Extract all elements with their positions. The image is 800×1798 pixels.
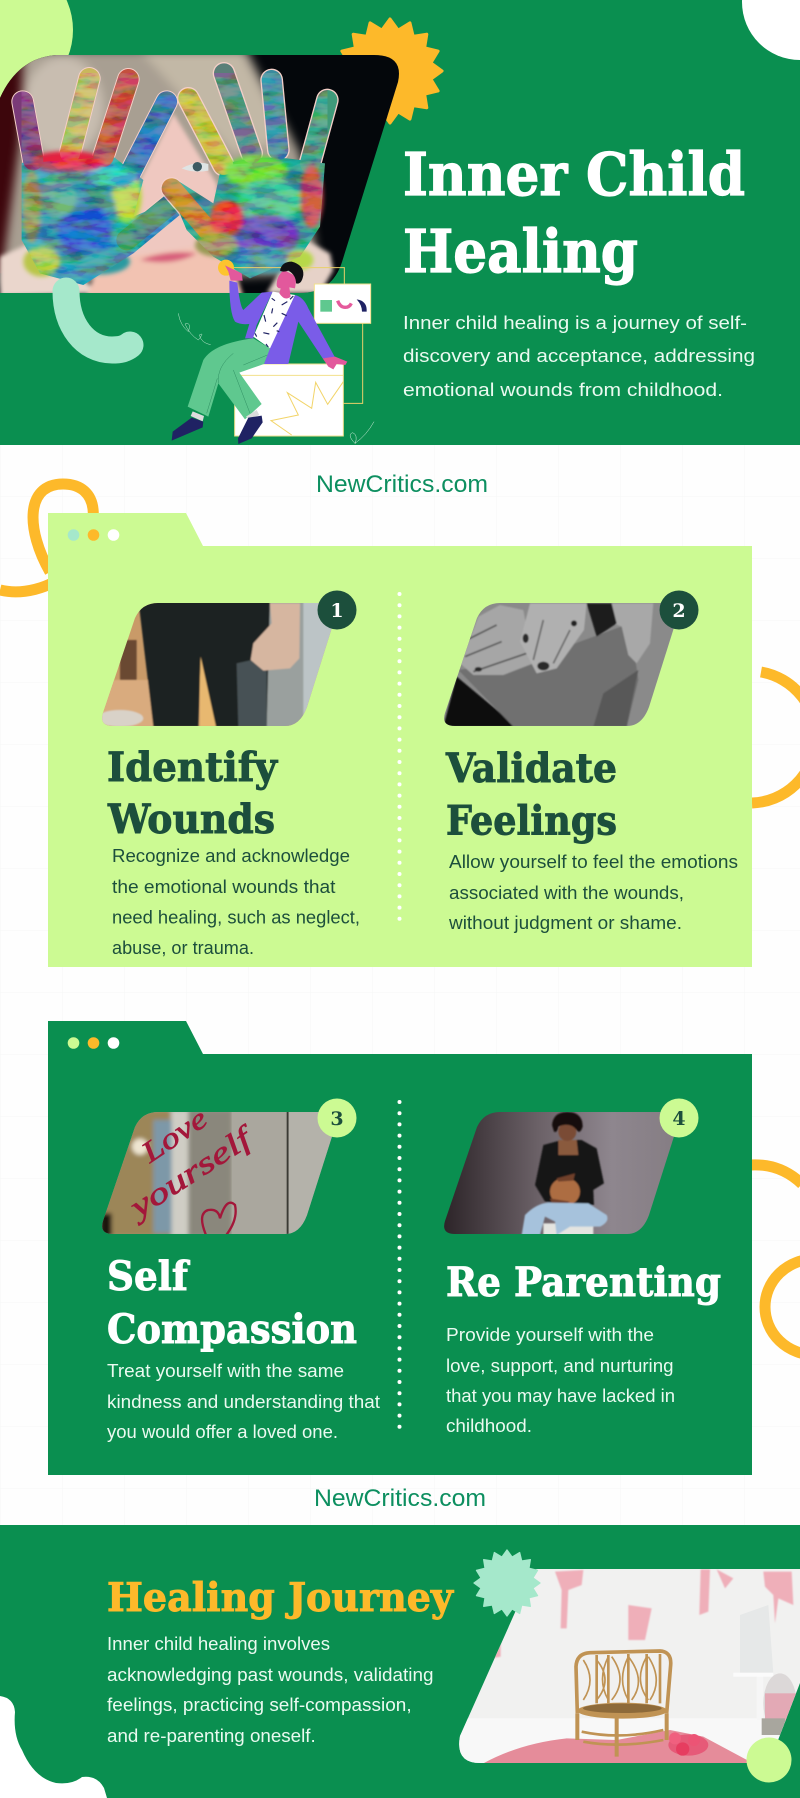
text: validate feelings: Allow yourself to feel the emotions (449, 852, 738, 872)
panel: steps 3 and 4 (48, 1021, 752, 1475)
badge 2 (660, 590, 698, 630)
text: identify wounds: abuse, or trauma. (112, 938, 254, 958)
watermark bottom: NewCritics.com (314, 1485, 486, 1512)
photo: wicker chair (450, 1565, 800, 1770)
badge 3 (318, 1098, 356, 1138)
photo: love yourself mirror (102, 1112, 332, 1234)
heading: identify wounds (107, 744, 279, 843)
text: identify wounds: Recognize and acknowledge (112, 846, 350, 866)
text: validate feelings (448, 852, 738, 933)
text: re parenting: that you may have lacked in (446, 1386, 675, 1406)
heading: identify wounds: Identify (107, 744, 279, 791)
decoration: yellow arc right (752, 672, 800, 803)
watermark top: NewCritics.com (316, 471, 488, 498)
photo: pregnant woman (444, 1112, 674, 1234)
text: identify wounds (112, 846, 360, 958)
decoration: yellow arc right lower (750, 1165, 800, 1184)
panel: steps 1 and 2 (48, 513, 752, 967)
photo: love yourself mirror: yourself (120, 1118, 262, 1226)
heading: validate feelings: Validate (445, 745, 617, 792)
illustration: person sitting on box (172, 260, 374, 444)
icon: yellow sun (338, 19, 442, 123)
badge 3: 3 (330, 1108, 344, 1130)
photo: hands on body (444, 603, 674, 726)
decoration: yellow ring right (765, 1259, 800, 1355)
decoration: yellow loop left (0, 484, 93, 592)
panel: hero (0, 0, 800, 445)
icon: light green circle (746, 1738, 792, 1782)
left hand (22, 78, 182, 285)
heading: validate feelings (445, 745, 617, 844)
text: self compassion (107, 1361, 380, 1442)
text: identify wounds: the emotional wounds that (112, 877, 336, 897)
heading: self compassion: Compassion (107, 1306, 357, 1353)
panel: footer (0, 1525, 800, 1798)
text: self compassion: Treat yourself with the same (107, 1361, 344, 1381)
text: validate feelings: without judgment or shame. (448, 913, 682, 933)
right hand (170, 73, 327, 278)
heading: self compassion (107, 1253, 357, 1353)
intro text: discovery and acceptance, addressing (403, 346, 755, 366)
photo: clenched fist (102, 603, 332, 726)
photo: love yourself mirror: Love (135, 1103, 213, 1170)
heading: identify wounds: Wounds (107, 796, 275, 843)
badge 2: 2 (672, 600, 686, 622)
heading: re parenting: Re Parenting (446, 1259, 721, 1306)
text: summary: feelings, practicing self-compassion, (107, 1695, 412, 1715)
text: re parenting: Provide yourself with the (446, 1325, 654, 1345)
text: validate feelings: associated with the wounds, (449, 883, 684, 903)
icon: mint curve (66, 291, 130, 350)
badge 4: 4 (672, 1108, 686, 1130)
badge 4 (660, 1098, 698, 1138)
text: summary (107, 1634, 434, 1746)
heading: healing journey: Healing Journey (107, 1575, 454, 1621)
title: Healing (403, 217, 638, 286)
icon: mint star (474, 1550, 540, 1616)
marbled paint overlay (22, 73, 327, 285)
text: summary: Inner child healing involves (107, 1634, 330, 1654)
text: self compassion: you would offer a loved one. (107, 1422, 338, 1442)
text: re parenting (446, 1325, 675, 1436)
title: Inner Child (403, 140, 745, 209)
badge 1: 1 (330, 600, 344, 622)
intro text: emotional wounds from childhood. (403, 380, 723, 400)
title (403, 140, 745, 286)
badge 1 (318, 590, 356, 630)
hero photo: painted hands (0, 55, 399, 293)
section background (0, 445, 800, 1525)
text: re parenting: love, support, and nurturing (446, 1356, 674, 1376)
text: summary: acknowledging past wounds, validating (107, 1665, 434, 1685)
text: re parenting: childhood. (446, 1416, 532, 1436)
heading: validate feelings: Feelings (446, 798, 617, 844)
text: identify wounds: need healing, such as neglect, (112, 908, 360, 928)
intro text (403, 313, 755, 400)
text: summary: and re-parenting oneself. (107, 1726, 316, 1746)
decoration: white blob (0, 1696, 107, 1798)
intro text: Inner child healing is a journey of self- (403, 313, 747, 333)
text: self compassion: kindness and understanding that (107, 1392, 380, 1412)
heading: self compassion: Self (107, 1253, 191, 1300)
